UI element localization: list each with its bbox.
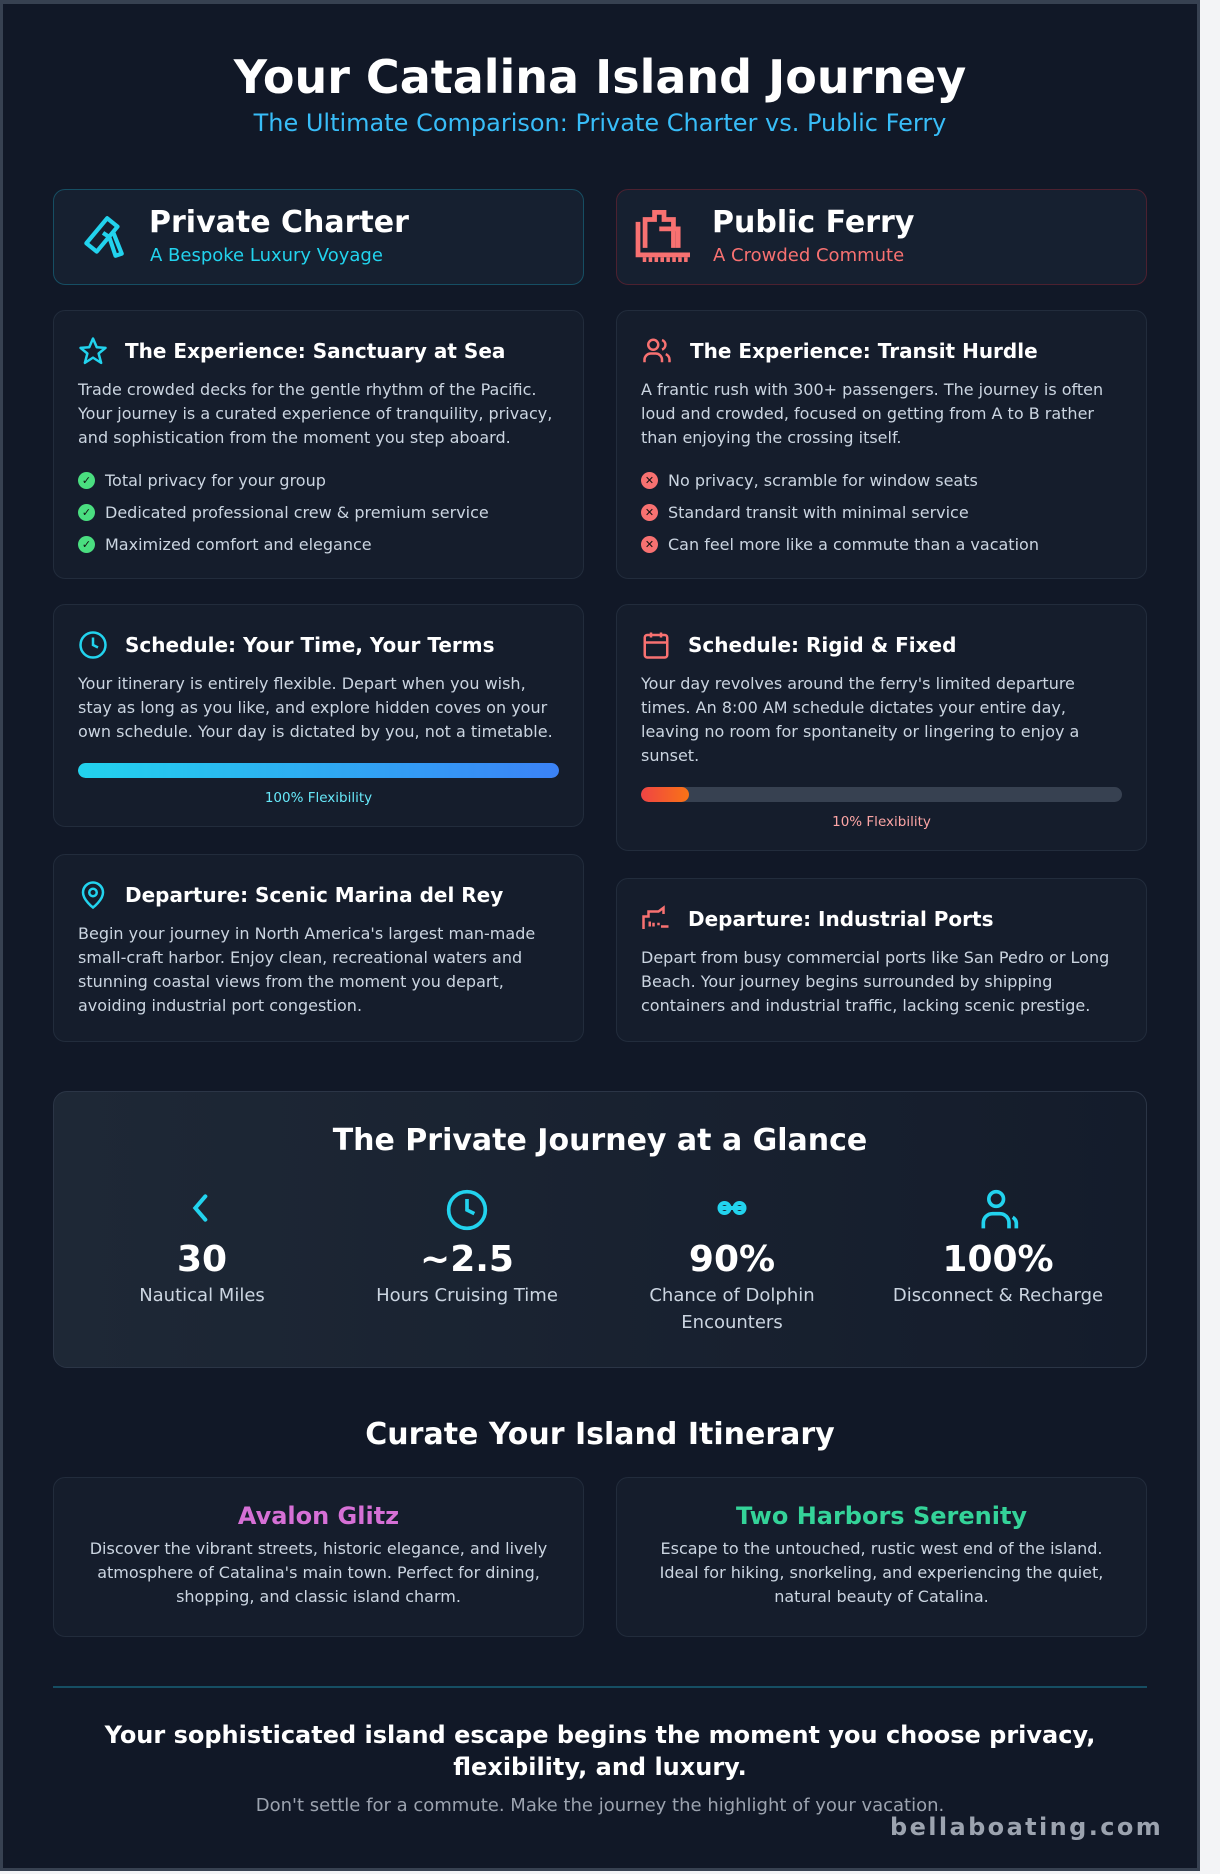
stat: recharge: Disconnect & Recharge bbox=[893, 1285, 1103, 1306]
tagline: A Bespoke Luxury Voyage bbox=[150, 245, 383, 266]
subtitle: The Ultimate Comparison: Private Charter vs. Public Ferry bbox=[254, 109, 946, 137]
panel: avalon: Discover the vibrant streets, historic elegance, and lively atmosphere of Catalina's main town. Perfect for dining, shopping, and classic island charm. bbox=[90, 1539, 547, 1606]
header: private charter bbox=[53, 189, 584, 285]
stat: recharge bbox=[893, 1190, 1103, 1306]
panel: departure ferry bbox=[616, 878, 1147, 1042]
panel: glance bbox=[53, 1091, 1147, 1368]
list bbox=[641, 470, 1039, 554]
panel: schedule private bbox=[53, 604, 584, 827]
heading: Departure: Industrial Ports bbox=[688, 907, 994, 931]
stat: hours: Hours Cruising Time bbox=[376, 1285, 558, 1306]
heading: itinerary: Curate Your Island Itinerary bbox=[365, 1417, 835, 1452]
list: Maximized comfort and elegance bbox=[105, 534, 372, 554]
heading: Departure: Scenic Marina del Rey bbox=[125, 883, 503, 907]
stat: hours: ~2.5 bbox=[420, 1239, 514, 1280]
list: ✕ bbox=[645, 506, 654, 518]
heading: Schedule: Rigid & Fixed bbox=[688, 633, 956, 657]
panel: experience ferry bbox=[616, 310, 1147, 579]
list: ✕ bbox=[645, 474, 654, 486]
list: Dedicated professional crew & premium service bbox=[105, 502, 489, 522]
stat: dolphins: 90% bbox=[689, 1239, 775, 1280]
stat: dolphins bbox=[649, 1201, 815, 1333]
panel: experience private bbox=[53, 310, 584, 579]
watermark: bellaboating.com bbox=[890, 1813, 1163, 1841]
stat: hours bbox=[376, 1190, 558, 1306]
list: ✕ bbox=[645, 538, 654, 550]
list: Can feel more like a commute than a vacation bbox=[668, 534, 1039, 554]
panel: schedule ferry bbox=[616, 604, 1147, 851]
title: Your Catalina Island Journey bbox=[234, 50, 966, 104]
stat: recharge: 100% bbox=[942, 1239, 1054, 1280]
stat: miles: Nautical Miles bbox=[139, 1285, 265, 1306]
heading: Schedule: Your Time, Your Terms bbox=[125, 633, 495, 657]
list: ✓ bbox=[82, 474, 91, 486]
label: 100% Flexibility bbox=[265, 790, 372, 806]
tagline: A Crowded Commute bbox=[713, 245, 904, 266]
list: ✓ bbox=[82, 506, 91, 518]
text: Your itinerary is entirely flexible. Depart when you wish, stay as long as you like, and explore hidden coves on your own schedule. Your day is dictated by you, not a timetable. bbox=[78, 674, 553, 741]
closing statement: Your sophisticated island escape begins the moment you choose privacy, flexibility, and luxury. bbox=[105, 1721, 1095, 1781]
list: No privacy, scramble for window seats bbox=[668, 470, 978, 490]
stat: miles: 30 bbox=[177, 1239, 227, 1280]
stat: miles bbox=[139, 1194, 265, 1306]
list: Total privacy for your group bbox=[105, 470, 326, 490]
text: Trade crowded decks for the gentle rhythm of the Pacific. Your journey is a curated experience of tranquility, privacy, and sophistication from the moment you step aboard. bbox=[78, 380, 552, 447]
label: 10% Flexibility bbox=[832, 814, 931, 830]
list bbox=[78, 470, 489, 554]
stat: dolphins: Encounters bbox=[681, 1312, 783, 1333]
panel: departure private bbox=[53, 854, 584, 1042]
icon: ferry bbox=[636, 210, 690, 262]
panel: two harbors bbox=[616, 1477, 1147, 1637]
text: A frantic rush with 300+ passengers. The journey is often loud and crowded, focused on getting from A to B rather than enjoying the crossing itself. bbox=[641, 380, 1103, 447]
list: ✓ bbox=[82, 538, 91, 550]
panel: two harbors: Two Harbors Serenity bbox=[736, 1502, 1027, 1530]
bar: 10% bbox=[641, 787, 1122, 802]
closing subtext: Don't settle for a commute. Make the journey the highlight of your vacation. bbox=[256, 1795, 944, 1816]
heading: The Private Journey at a Glance bbox=[333, 1123, 867, 1158]
heading: The Experience: Transit Hurdle bbox=[690, 339, 1038, 363]
heading: Private Charter bbox=[149, 205, 409, 240]
heading: Public Ferry bbox=[712, 205, 914, 240]
list: Standard transit with minimal service bbox=[668, 502, 969, 522]
icon: ticket bbox=[84, 216, 124, 258]
text: Depart from busy commercial ports like San Pedro or Long Beach. Your journey begins surrounded by shipping containers and industrial traffic, lacking scenic prestige. bbox=[641, 948, 1109, 1015]
text: Begin your journey in North America's largest man-made small-craft harbor. Enjoy clean, recreational waters and stunning coastal views from the moment you depart, avoiding industrial port congestion. bbox=[78, 924, 535, 1015]
panel: two harbors: Escape to the untouched, rustic west end of the island. Ideal for hiking, snorkeling, and experiencing the quiet, natural beauty of Catalina. bbox=[660, 1539, 1103, 1606]
bar: 100% bbox=[78, 763, 559, 778]
header: public ferry bbox=[616, 189, 1147, 285]
stat: dolphins: Chance of Dolphin bbox=[649, 1285, 815, 1306]
panel: avalon bbox=[53, 1477, 584, 1637]
heading: The Experience: Sanctuary at Sea bbox=[125, 339, 505, 363]
panel: avalon: Avalon Glitz bbox=[238, 1502, 399, 1530]
text: Your day revolves around the ferry's limited departure times. An 8:00 AM schedule dictates your entire day, leaving no room for spontaneity or lingering to enjoy a sunset. bbox=[641, 674, 1079, 765]
